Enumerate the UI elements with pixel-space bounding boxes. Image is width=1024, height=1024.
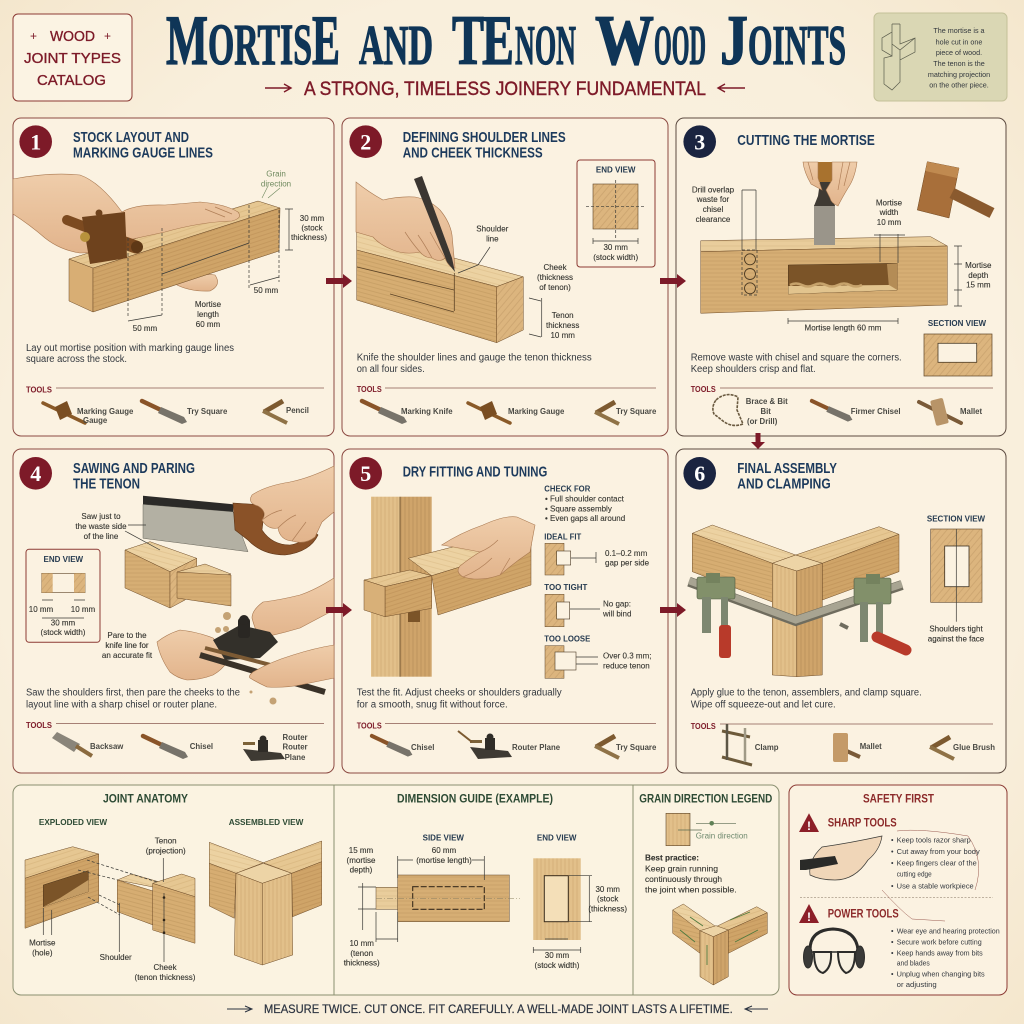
dimension labels: clearance: [696, 215, 731, 224]
dimension labels: 50 mm: [254, 286, 279, 295]
anatomy labels: [29, 836, 196, 982]
end view inset: (stock width): [41, 628, 86, 637]
tools row: TOOLS: [691, 384, 716, 394]
heading: [73, 460, 195, 492]
end view inset: 10 mm: [29, 605, 54, 614]
section: joint anatomy: EXPLODED VIEW: [39, 818, 107, 827]
description: square across the stock.: [26, 354, 127, 365]
section view: Shoulders tight: [929, 625, 983, 634]
labels: knife line for: [105, 641, 149, 650]
sharp tools list: Keep fingers clear of the: [897, 858, 977, 867]
fit example: too loose: reduce tenon: [603, 661, 650, 670]
section: dimension guide: (stock width): [535, 961, 580, 970]
sharp tools list: •: [891, 858, 894, 867]
tools row: Chisel: [190, 742, 213, 751]
tools row: Router: [282, 733, 308, 742]
icon: joint line drawing: [882, 24, 915, 90]
dimension labels: (stock: [301, 224, 324, 233]
heading: SAWING AND PARING: [73, 460, 195, 477]
description: Test the fit. Adjust cheeks or shoulders gradually: [357, 688, 562, 699]
section: grain direction legend: GRAIN DIRECTION LEGEND: [639, 793, 772, 805]
dimension labels: Mortise length 60 mm: [805, 324, 882, 333]
dimension labels: 15 mm: [966, 281, 991, 290]
section: dimension guide: END VIEW: [537, 834, 577, 843]
heading: [73, 129, 213, 162]
definition box: piece of wood.: [936, 48, 982, 57]
anatomy labels: Mortise: [29, 939, 56, 948]
arrow: step 4 to 5: [326, 603, 352, 617]
heading: MARKING GAUGE LINES: [73, 144, 213, 162]
illustration: stock with marking gauge and hands: [13, 174, 293, 321]
clamp right: [854, 574, 906, 650]
step number 5: 5: [360, 461, 371, 486]
catalog badge: CATALOG: [37, 72, 106, 89]
tools row: Plane: [285, 753, 306, 762]
tools row: [357, 721, 657, 759]
step number 4: [19, 457, 52, 490]
description: Saw the shoulders first, then pare the cheeks to the: [26, 688, 240, 699]
heading: DRY FITTING AND TUNING: [403, 464, 547, 481]
panel: step 2: [342, 118, 668, 436]
illustration: router plane and hands: [157, 578, 334, 704]
power tools list: Wear eye and hearing protection: [897, 926, 1000, 935]
power tools list: [891, 926, 1000, 989]
tools row: [26, 385, 324, 425]
dimension labels: Mortise: [876, 199, 903, 208]
power tools list: •: [891, 937, 894, 946]
labels: of the line: [84, 532, 119, 541]
heading: STOCK LAYOUT AND: [73, 129, 189, 146]
section: grain direction legend: the joint when possible.: [645, 885, 737, 894]
icon: hand with chisel: [800, 836, 882, 880]
tools row: (or Drill): [747, 417, 778, 426]
dimension labels: width: [879, 208, 898, 217]
tools row: Glue Brush: [953, 743, 995, 752]
dimension labels: length: [197, 310, 219, 319]
labels: [75, 512, 153, 660]
dimension labels: Shoulder: [476, 225, 509, 234]
panel: step 4: [13, 449, 334, 773]
clamp left: [697, 573, 735, 658]
dimension labels: Grain: [266, 170, 286, 179]
section view: SECTION VIEW: [928, 319, 987, 328]
dimension labels: depth: [968, 271, 988, 280]
fit example: too tight: TOO TIGHT: [544, 583, 587, 592]
power tools list: •: [891, 949, 894, 958]
title: J: [720, 2, 748, 80]
description: [357, 353, 592, 375]
tools row: Try Square: [187, 407, 228, 416]
fit example: too tight: No gap:: [603, 600, 631, 609]
catalog badge: WOOD: [50, 28, 95, 45]
definition box: [874, 13, 1007, 101]
dimension labels: Tenon: [552, 311, 574, 320]
step number 2: [349, 125, 382, 158]
heading: CUTTING THE MORTISE: [737, 132, 875, 149]
dimension labels: of tenon): [539, 283, 571, 292]
heading: DEFINING SHOULDER LINES: [403, 129, 566, 146]
dimension labels: Mortise: [195, 300, 222, 309]
dimension labels: [476, 225, 579, 340]
sharp tools list: •: [891, 882, 894, 891]
icon: warning triangle power: !: [807, 910, 811, 924]
labels: Pare to the: [107, 631, 147, 640]
section: dimension guide: 30 mm: [545, 951, 570, 960]
anatomy labels: (projection): [146, 846, 186, 855]
step number 5: [349, 457, 382, 490]
anatomy labels: Tenon: [155, 836, 177, 845]
section: dimension guide: SIDE VIEW: [423, 834, 464, 843]
tools row: [26, 720, 324, 762]
section: joint anatomy: [25, 793, 322, 982]
fit example: too tight: will bind: [602, 610, 631, 619]
tools row: Bit: [760, 407, 771, 416]
power tools list: •: [891, 926, 894, 935]
arrow: step 3 to 6: [751, 433, 765, 449]
description: Lay out mortise position with marking gauge lines: [26, 343, 234, 354]
dimension labels: thickness): [291, 233, 327, 242]
tools row: Clamp: [755, 743, 779, 752]
dimension labels: (thickness: [537, 273, 573, 282]
step number 4: 4: [30, 461, 41, 486]
definition box: hole cut in one: [936, 38, 982, 46]
section: dimension guide: (mortise length): [416, 856, 472, 865]
icon: warning triangle power: [799, 904, 819, 924]
check list: CHECK FOR: [544, 485, 591, 494]
end view inset: [26, 549, 100, 642]
end view inset: 30 mm: [51, 618, 76, 628]
arrow: step 1 to 2: [326, 274, 352, 288]
icon: warning triangle sharp: [799, 813, 819, 833]
sharp tools list: •: [891, 836, 894, 845]
end view inset: 30 mm: [603, 243, 628, 252]
anatomy labels: Cheek: [153, 963, 178, 972]
tools row: TOOLS: [357, 721, 382, 731]
step number 6: 6: [694, 461, 705, 486]
tools row: Pencil: [286, 406, 309, 415]
dimension labels: 50 mm: [133, 324, 158, 333]
description: Keep shoulders crisp and flat.: [691, 364, 816, 375]
tools row: [357, 384, 657, 424]
assembled view drawing: [209, 841, 322, 965]
labels: the waste side: [75, 522, 127, 531]
tools row: Try Square: [616, 743, 657, 752]
definition box: on the other piece.: [929, 80, 989, 90]
tools row: Firmer Chisel: [851, 407, 901, 416]
anatomy labels: Shoulder: [100, 953, 132, 962]
section: grain direction legend: continuously through: [645, 875, 722, 884]
dimension labels: [133, 170, 327, 333]
heading: THE TENON: [73, 476, 140, 492]
sharp tools list: Cut away from your body: [897, 847, 980, 856]
dimension labels: thickness: [546, 321, 579, 330]
tools row: TOOLS: [357, 384, 382, 394]
panel: step 6: [676, 449, 1006, 773]
title: E: [482, 2, 514, 80]
dimension labels: chisel: [703, 205, 723, 214]
heading: AND CHEEK THICKNESS: [403, 144, 543, 162]
section view: [924, 319, 992, 376]
step number 6: [683, 457, 716, 490]
tools row: Chisel: [411, 743, 434, 752]
dimension labels: 10 mm: [877, 218, 902, 227]
section: dimension guide: 10 mm: [349, 939, 374, 948]
dimension labels: 30 mm: [300, 214, 325, 223]
step number 2: 2: [360, 130, 371, 154]
fit example: ideal: gap per side: [605, 559, 650, 568]
section: dimension guide: 30 mm: [595, 885, 620, 894]
fit example: ideal: [544, 532, 650, 575]
sharp tools list: •: [891, 847, 894, 856]
description: layout line with a sharp chisel or router plane.: [26, 699, 217, 710]
section: dimension guide: (tenon: [350, 949, 373, 958]
description: [26, 343, 234, 365]
title: ORTIS: [208, 12, 312, 77]
tools row: [691, 384, 993, 426]
panel: reference strip: [13, 785, 779, 995]
section view: against the face: [928, 635, 985, 644]
tools row: Router Plane: [512, 743, 561, 752]
description: [357, 688, 562, 710]
labels: an accurate fit: [102, 651, 153, 660]
step number 1: 1: [30, 130, 41, 154]
exploded view drawing: [25, 847, 195, 962]
end view inset: END VIEW: [596, 166, 636, 175]
tools row: Marking Gauge: [77, 407, 134, 416]
section: dimension guide: DIMENSION GUIDE (EXAMPLE): [397, 793, 553, 805]
power tools list: Keep hands away from bits: [897, 949, 983, 958]
description: [691, 688, 922, 710]
dimension labels: 10 mm: [550, 331, 575, 340]
tools row: Try Square: [616, 407, 657, 416]
definition box: matching projection: [928, 70, 990, 79]
footer tagline: MEASURE TWICE. CUT ONCE. FIT CAREFULLY. A WELL-MADE JOINT LASTS A LIFETIME.: [264, 1004, 733, 1016]
tools row: Brace & Bit: [746, 397, 788, 406]
section: dimension guide: 60 mm: [432, 846, 457, 855]
definition box: The mortise is a: [933, 26, 985, 35]
step number 3: 3: [694, 130, 705, 154]
dimension labels: Cheek: [543, 263, 568, 272]
dimension labels: [692, 186, 992, 333]
end view inset: 10 mm: [71, 605, 96, 614]
catalog badge: +: [104, 29, 111, 43]
sharp tools list: Keep tools razor sharp: [897, 836, 971, 845]
power tools list: Secure work before cutting: [897, 937, 982, 946]
illustration: test fitting the joint: [364, 497, 535, 677]
dimension labels: Mortise: [965, 261, 992, 270]
catalog badge: [13, 14, 132, 101]
panel: step 3: [676, 118, 1006, 436]
section: grain direction legend: Best practice:: [645, 854, 699, 863]
panel: safety first: SAFETY FIRST: [863, 793, 934, 805]
section view: [927, 515, 986, 644]
tools row: Mallet: [860, 742, 882, 751]
power tools list: •: [891, 970, 894, 979]
tools row: Router: [282, 742, 308, 752]
title: T: [452, 2, 484, 80]
panel: step 1: [13, 118, 334, 436]
fit example: too loose: Over 0.3 mm;: [603, 651, 651, 660]
section: grain direction legend: Keep grain running: [645, 865, 718, 874]
step number 3: [683, 125, 716, 158]
section: dimension guide: (mortise: [347, 856, 376, 865]
anatomy labels: (hole): [32, 949, 53, 958]
heading: [403, 129, 566, 162]
section: dimension guide: (thickness): [588, 905, 627, 914]
panel: step 5: [342, 449, 668, 773]
fit example: ideal: 0.1–0.2 mm: [605, 549, 648, 558]
section: dimension guide: 15 mm: [349, 846, 374, 855]
sharp tools heading: SHARP TOOLS: [828, 818, 897, 830]
tools row: TOOLS: [26, 385, 52, 395]
section view: SECTION VIEW: [927, 515, 986, 524]
icon: warning triangle sharp: !: [807, 819, 811, 833]
description: Remove waste with chisel and square the corners.: [691, 353, 902, 364]
description: Knife the shoulder lines and gauge the tenon thickness: [357, 353, 592, 364]
tools row: TOOLS: [691, 721, 716, 731]
illustration: chiselling the mortise: [701, 162, 992, 324]
tools row: Backsaw: [90, 742, 124, 751]
dimension labels: line: [486, 235, 499, 244]
title: M: [166, 2, 208, 80]
description: on all four sides.: [357, 364, 425, 375]
tools row: Gauge: [83, 416, 108, 425]
title: OOD: [654, 15, 706, 77]
section: dimension guide: [344, 793, 627, 970]
step number 1: [19, 125, 52, 158]
section: grain direction legend: Grain direction: [696, 831, 748, 840]
description: for a smooth, snug fit without force.: [357, 699, 508, 710]
fit example: too tight: [544, 583, 631, 627]
description: Wipe off squeeze-out and let cure.: [691, 699, 836, 710]
end view inset: (stock width): [593, 253, 638, 262]
tools row: TOOLS: [26, 720, 52, 730]
title: E: [312, 2, 340, 80]
section: dimension guide: thickness): [344, 959, 380, 968]
description: Apply glue to the tenon, assemblers, and clamp square.: [691, 688, 922, 699]
heading: FINAL ASSEMBLY: [737, 460, 837, 477]
title: NON: [515, 15, 576, 77]
arrow: step 2 to 3: [660, 274, 686, 288]
section: dimension guide: (stock: [597, 895, 619, 904]
side view drawing: [358, 856, 520, 942]
end view inset: [577, 160, 655, 267]
check list: • Square assembly: [545, 505, 612, 514]
description: [26, 688, 240, 710]
tools row: [691, 721, 995, 765]
power tools list: and blades: [897, 959, 930, 968]
illustration: backsaw and tenon: [125, 466, 334, 608]
catalog badge: +: [30, 29, 37, 43]
power tools list: or adjusting: [897, 980, 937, 989]
dimension labels: 60 mm: [196, 320, 221, 329]
power tools list: Unplug when changing bits: [897, 970, 985, 979]
labels: Saw just to: [81, 512, 121, 521]
dimension labels: direction: [261, 180, 291, 189]
heading: [737, 460, 837, 492]
section: joint anatomy: ASSEMBLED VIEW: [229, 818, 304, 827]
check list: • Full shoulder contact: [545, 495, 625, 504]
title: OINTS: [748, 15, 846, 77]
panel: safety first: [789, 785, 1007, 995]
tools row: Mallet: [960, 407, 982, 416]
illustration: clamped joint: [689, 525, 906, 677]
sharp tools list: Use a stable workpiece: [897, 882, 974, 891]
title: [166, 2, 846, 80]
end view drawing: [533, 858, 592, 953]
section: grain direction legend: [639, 793, 772, 985]
tools row: Marking Gauge: [508, 407, 565, 416]
icon: goggles and ear muffs: [804, 929, 864, 973]
tools row: Marking Knife: [401, 407, 453, 416]
anatomy labels: (tenon thickness): [135, 973, 196, 982]
dimension labels: waste for: [696, 195, 730, 204]
sharp tools list: cutting edge: [897, 870, 932, 879]
fit example: too loose: [544, 635, 651, 678]
illustration: knifing shoulder lines: [356, 176, 542, 343]
catalog badge: JOINT TYPES: [24, 50, 121, 67]
grain joint drawing: [673, 904, 767, 985]
arrow: step 5 to 6: [660, 603, 686, 617]
sharp tools list: [891, 836, 980, 891]
end view inset: END VIEW: [44, 555, 84, 564]
check list: [544, 485, 625, 523]
description: [691, 353, 902, 375]
section: joint anatomy: JOINT ANATOMY: [103, 793, 188, 805]
power tools heading: POWER TOOLS: [828, 908, 899, 920]
subtitle: A STRONG, TIMELESS JOINERY FUNDAMENTAL: [304, 79, 706, 100]
check list: • Even gaps all around: [545, 514, 625, 523]
fit example: too loose: TOO LOOSE: [544, 635, 591, 644]
section: dimension guide: depth): [350, 866, 373, 875]
heading: AND CLAMPING: [737, 476, 831, 492]
definition box: The tenon is the: [933, 59, 985, 68]
title: AND: [359, 15, 433, 77]
title: W: [595, 2, 654, 80]
fit example: ideal: IDEAL FIT: [544, 532, 581, 541]
dimension labels: Drill overlap: [692, 186, 735, 195]
